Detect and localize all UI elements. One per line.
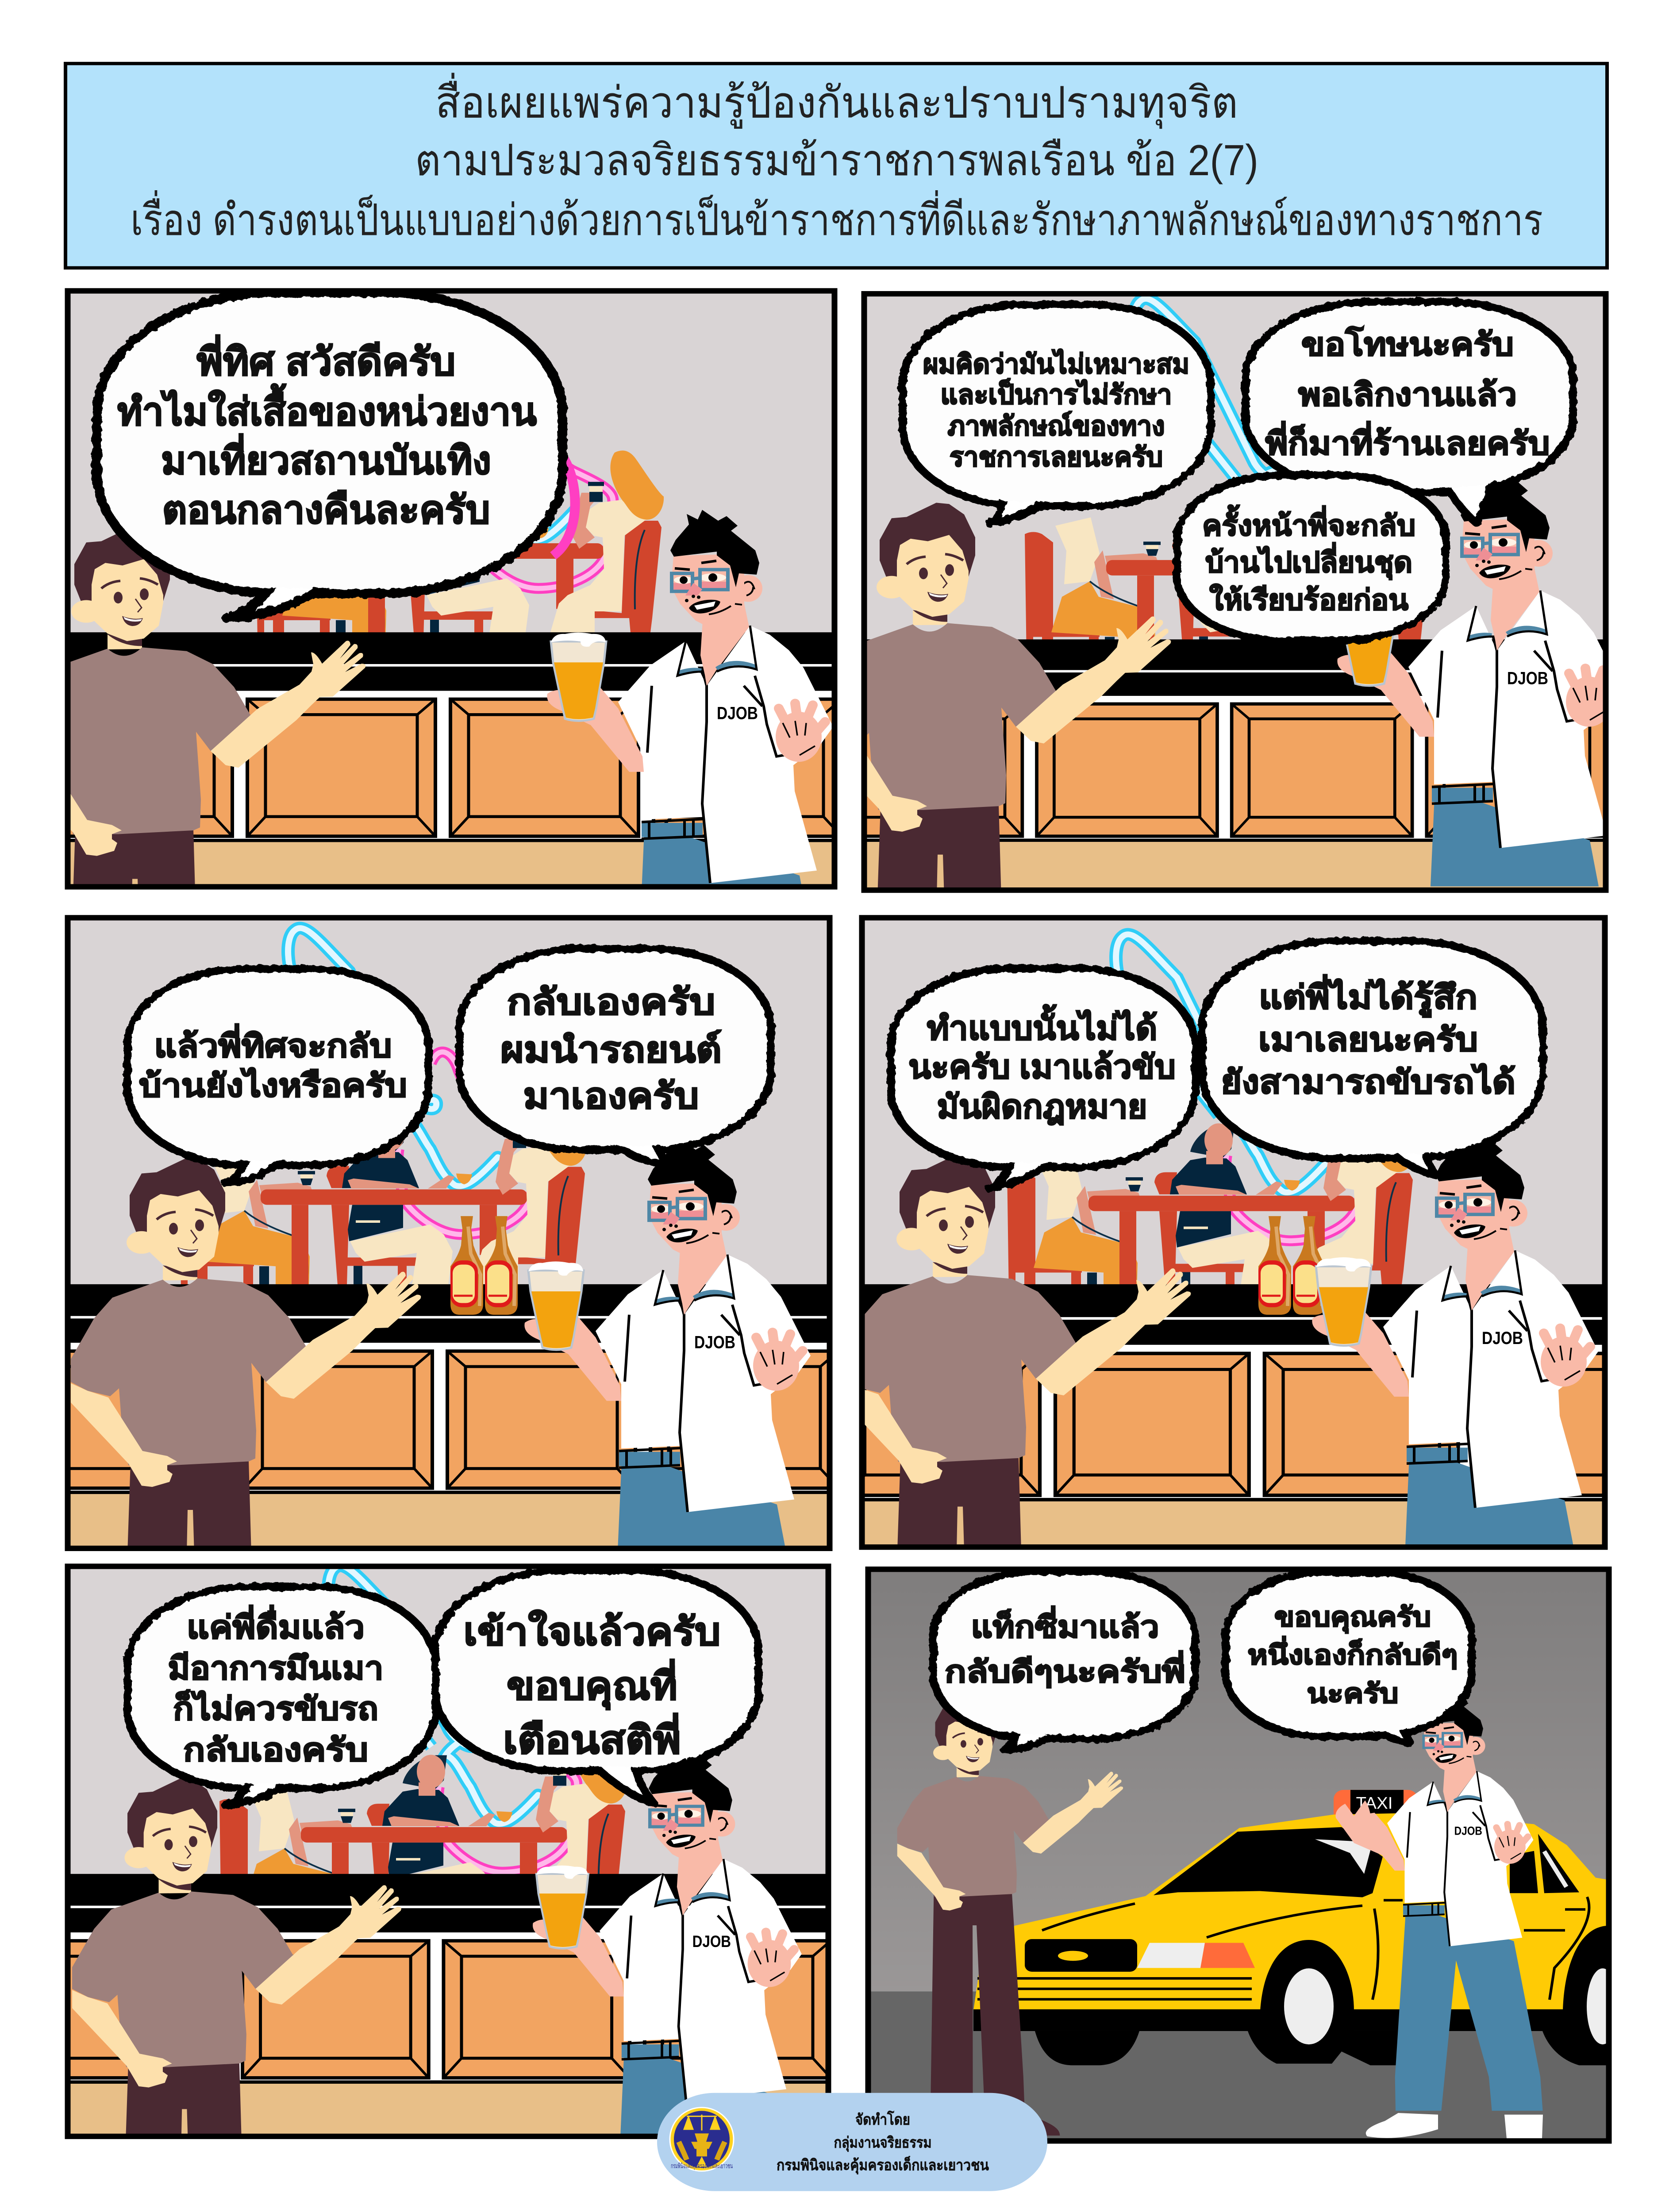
footer credit pill: จัดทำโดย: [855, 2111, 910, 2128]
speech bubble 6b: ขอบคุณครับ: [1274, 1602, 1431, 1633]
speech bubble 4b: [1202, 941, 1543, 1175]
speech bubble 1: พี่ทิศ สวัสดีครับ: [196, 334, 456, 383]
speech bubble 3b: มาเองครับ: [523, 1075, 699, 1116]
panel 3: how will you get home: [23, 915, 842, 1577]
driver raised hand: [1335, 1801, 1383, 1855]
speech bubble 6a: [933, 1572, 1195, 1750]
speech bubble 2c: ให้เรียบร้อยก่อน: [1209, 583, 1408, 616]
speech bubble 5b: เตือนสติพี่: [503, 1713, 681, 1761]
speech bubble 2a: [903, 305, 1211, 523]
speech bubble 6a: กลับดีๆนะครับพี่: [945, 1650, 1185, 1689]
speech bubble 2b: พอเลิกงานแล้ว: [1298, 376, 1517, 412]
icon: beer bottles: [1258, 1216, 1326, 1315]
speech bubble 4b: ยังสามารถขับรถได้: [1221, 1063, 1515, 1101]
speech bubble 4b: เมาเลยนะครับ: [1258, 1022, 1478, 1058]
speech bubble 2a: และเป็นการไม่รักษา: [940, 378, 1172, 410]
title banner: ตามประมวลจริยธรรมข้าราชการพลเรือน ข้อ 2(7): [415, 136, 1258, 184]
speech bubble 3b: กลับเองครับ: [507, 982, 715, 1022]
panel 1: greeting at the bar: [65, 288, 837, 890]
speech bubble 5b: [435, 1571, 758, 1803]
speech bubble 1: มาเที่ยวสถานบันเทิง: [161, 434, 491, 482]
taxi: [973, 1790, 1619, 2065]
speech bubble 5b: เข้าใจแล้วครับ: [464, 1609, 721, 1653]
speech bubble 6a: แท็กซี่มาแล้ว: [971, 1605, 1159, 1644]
speech bubble 2c: ครั้งหน้าพี่จะกลับ: [1202, 504, 1415, 542]
footer credit pill: กลุ่มงานจริยธรรม: [834, 2134, 932, 2152]
speech bubble 1: ตอนกลางคืนละครับ: [162, 488, 490, 531]
speech bubble 2a: ภาพลักษณ์ของทาง: [947, 411, 1165, 441]
speech bubble 4a: มันผิดกฎหมาย: [937, 1089, 1147, 1125]
panel 5: understanding and thanks: [23, 1563, 834, 2166]
speech bubble 3a: แล้วพี่ทิศจะกลับ: [154, 1023, 392, 1064]
speech bubble 5b: ขอบคุณที่: [507, 1659, 677, 1710]
title banner: สื่อเผยแพร่ความรู้ป้องกันและปราบปรามทุจริต: [435, 73, 1238, 129]
speech bubble 2b: ขอโทษนะครับ: [1301, 326, 1514, 362]
panel 2: apology at the bar: [861, 291, 1609, 893]
man in white shirt: [1339, 1693, 1543, 2111]
speech bubble 4b: แต่พี่ไม่ได้รู้สึก: [1259, 974, 1477, 1018]
speech bubble 5a: แค่พี่ดื่มแล้ว: [187, 1605, 365, 1645]
panel 4: drunk driving warning: [827, 915, 1671, 1587]
footer credit pill: [657, 2093, 1047, 2191]
speech bubble 3a: [127, 969, 428, 1183]
footer credit pill: กรมพินิจและคุ้มครองเด็กและเยาวชน: [777, 2156, 989, 2174]
sandals: [1366, 2113, 1543, 2139]
panel 6: taxi arrives: [865, 1567, 1619, 2144]
speech bubble 2a: ผมคิดว่ามันไม่เหมาะสม: [923, 348, 1189, 379]
speech bubble 3b: [459, 949, 771, 1165]
speech bubble 2b: [1246, 302, 1573, 523]
speech bubble 5a: กลับเองครับ: [183, 1732, 368, 1767]
speech bubble 4a: นะครับ เมาแล้วขับ: [908, 1049, 1176, 1086]
speech bubble 3b: ผมนำรถยนต์: [500, 1029, 722, 1070]
taxi: TAXI: [1356, 1794, 1392, 1813]
speech bubble 4a: ทำแบบนั้นไม่ได้: [927, 1004, 1157, 1047]
speech bubble 2b: พี่ก็มาที่ร้านเลยครับ: [1265, 421, 1550, 461]
speech bubble 4a: [891, 968, 1195, 1189]
speech bubble 3a: บ้านยังไงหรือครับ: [139, 1067, 407, 1103]
speech bubble 5a: ก็ไม่ควรขับรถ: [173, 1690, 378, 1727]
man in brown shirt: [897, 1698, 1123, 2137]
speech bubble 2a: ราชการเลยนะครับ: [950, 442, 1163, 472]
speech bubble 2c: [1177, 475, 1446, 641]
title banner: [65, 64, 1607, 268]
icon: department emblem: กรมพินิจและคุ้มครองเด็กและเยาวชน: [671, 2161, 733, 2170]
icon: beer bottles: [450, 1216, 518, 1315]
speech bubble 6b: [1226, 1573, 1472, 1743]
speech bubble 1: [97, 292, 562, 618]
speech bubble 2c: บ้านไปเปลี่ยนชุด: [1205, 542, 1412, 580]
speech bubble 1: ทำไมใส่เสื้อของหน่วยงาน: [117, 384, 537, 433]
speech bubble 5a: [127, 1587, 435, 1805]
icon: department emblem: [670, 2108, 734, 2171]
speech bubble 5a: มีอาการมึนเมา: [168, 1651, 383, 1686]
speech bubble 6b: หนึ่งเองก็กลับดีๆ: [1248, 1636, 1458, 1670]
speech bubble 6b: นะครับ: [1307, 1679, 1399, 1709]
